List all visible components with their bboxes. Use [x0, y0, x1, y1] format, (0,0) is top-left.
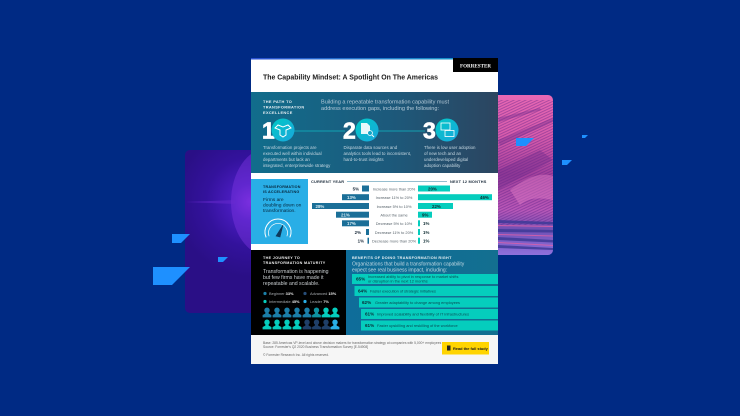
- left values: [316, 186, 364, 244]
- benefit 1: 65%: [356, 276, 365, 282]
- legend: Leader 7%: [310, 299, 329, 304]
- benefit 5: [361, 320, 498, 330]
- left values: 5%: [353, 186, 359, 192]
- step 1 text: departments but lack an: [263, 157, 310, 162]
- step 2 number and icon: [343, 118, 378, 144]
- panel: path to transformation excellence: [251, 92, 498, 173]
- legend: Intermediate 45%: [269, 299, 300, 304]
- connector lines: [294, 130, 425, 132]
- benefit 1: Increased ability to pivot in response to market shifts: [368, 274, 458, 279]
- step 2 number and icon: 2: [343, 118, 356, 144]
- logo: Forrester: FORRESTER: [460, 64, 492, 70]
- step 3 number and icon: [423, 118, 458, 144]
- right values: 1%: [423, 221, 429, 226]
- button: read the full study: [442, 342, 489, 354]
- legend: Advanced 15%: [310, 291, 337, 296]
- benefit 5: 61%: [365, 323, 374, 328]
- benefit 1: [352, 274, 498, 284]
- step 2 text: hard-to-trust insights: [344, 157, 384, 162]
- right values: 1%: [423, 230, 429, 235]
- heading: path: TRANSFORMATION: [263, 104, 305, 110]
- heading: journey: THE JOURNEY TO: [263, 256, 300, 260]
- people pictogram: [263, 308, 339, 329]
- step 2 text: analytics tools lead to inconsistent,: [344, 151, 411, 156]
- category labels: Decrease 5% to 10%: [376, 221, 413, 226]
- right values: 46%: [480, 195, 489, 200]
- category labels: Increase 5% to 10%: [377, 204, 412, 209]
- right values: 20%: [428, 186, 437, 192]
- step 1 text: executed well within individual: [263, 151, 322, 156]
- icon: gauge: [265, 219, 291, 237]
- text: benefits intro: expect see real business impact, including:: [352, 268, 447, 274]
- benefit 4: 61%: [365, 312, 374, 316]
- benefit 2: 64%: [358, 288, 367, 294]
- decorative blue shapes: [153, 135, 588, 285]
- panel: benefits of doing transformation right: [346, 250, 498, 335]
- benefit 3: [359, 298, 498, 308]
- left values: 17%: [347, 221, 356, 226]
- chart: current year vs next 12 months: CURRENT YEAR: [311, 179, 344, 184]
- legend: Beginner 33%: [269, 291, 294, 296]
- benefit 4: Improved scalability and flexibility of IT infrastructures: [377, 311, 469, 316]
- chart: current year vs next 12 months: [311, 179, 492, 244]
- footnote: Base: 285 Americas VP-level and above decision makers for transformation strategy at companies with 5,000+ employees: [263, 341, 442, 345]
- heading: path: THE PATH TO: [263, 99, 292, 104]
- benefit 5: Faster upskilling and reskilling of the workforce: [377, 323, 458, 328]
- benefit 4: [361, 309, 498, 319]
- panel: journey to transformation maturity: [251, 250, 346, 335]
- text: firms: transformation.: [263, 208, 296, 214]
- step 1 number and icon: 1: [262, 118, 275, 144]
- right bars: [418, 186, 492, 244]
- left values: 28%: [316, 204, 324, 209]
- right values: 22%: [432, 204, 441, 209]
- benefit 3: Greater adaptability to change among employees: [375, 300, 460, 305]
- right values: [422, 186, 489, 244]
- panel: transformation is accelerating: [251, 179, 308, 244]
- heading: journey: TRANSFORMATION MATURITY: [263, 261, 326, 265]
- benefit 1: or disruption in the next 12 months: [368, 278, 428, 284]
- left values: 2%: [355, 230, 361, 235]
- intro text: address execution gaps, including the following:: [321, 106, 439, 112]
- infographic document: [251, 58, 498, 364]
- step 2 text: Disparate data sources and: [344, 145, 398, 150]
- left values: 13%: [347, 195, 356, 200]
- category labels: Increase more than 20%: [373, 186, 416, 192]
- heading: benefits: BENEFITS OF DOING TRANSFORMATION RIGHT: [352, 256, 452, 260]
- step 3 text: There is low user adoption: [424, 145, 476, 150]
- benefit 2: [354, 286, 498, 296]
- step 1 number and icon: [262, 118, 294, 144]
- category labels: Increase 11% to 20%: [376, 195, 413, 200]
- step 3 number and icon: 3: [423, 118, 436, 144]
- text: maturity: repeatable and scalable.: [263, 281, 320, 287]
- footnote: Source: Forrester's Q2 2020 Business Transformation Survey [E-54908]: [263, 345, 368, 349]
- image panel: purple light sphere: [185, 148, 305, 313]
- image panel: pink textured waves: [485, 95, 553, 255]
- intro text: Building a repeatable transformation capability must: [321, 100, 449, 106]
- left values: 21%: [341, 212, 350, 218]
- text: benefits intro: Organizations that build a transformation capability: [352, 262, 465, 268]
- copyright: © Forrester Research Inc. All rights reserved.: [263, 353, 329, 357]
- category labels: Decrease more than 20%: [372, 238, 417, 244]
- right values: 1%: [423, 238, 429, 244]
- footer: [251, 335, 498, 364]
- heading: path: EXCELLENCE: [263, 110, 293, 115]
- legend: [263, 291, 337, 304]
- category labels: [372, 186, 417, 244]
- left values: 1%: [358, 238, 364, 244]
- title: The Capability Mindset: A Spotlight On The Americas: [263, 74, 438, 82]
- step 3 text: adoption capability: [424, 163, 461, 168]
- logo: Forrester: [453, 58, 498, 72]
- text: firms: Firms are: [263, 197, 284, 203]
- step 3 text: underdeveloped digital: [424, 157, 468, 162]
- text: maturity: but few firms have made it: [263, 275, 324, 281]
- left bars: [312, 186, 369, 244]
- button: read the full study: Read the full study: [453, 346, 489, 351]
- step 1 text: integrated, enterprisewide strategy: [263, 163, 331, 168]
- chart: current year vs next 12 months: NEXT 12 MONTHS: [450, 179, 487, 184]
- heading: accelerating: IS ACCELERATING: [263, 190, 299, 194]
- benefit 3: 62%: [362, 300, 371, 305]
- text: maturity: Transformation is happening: [263, 269, 329, 275]
- right values: 9%: [422, 212, 428, 218]
- heading: accelerating: TRANSFORMATION: [263, 185, 301, 189]
- benefit 2: Faster execution of strategic initiatives: [370, 288, 436, 293]
- step 3 text: of new tech and an: [424, 151, 462, 156]
- category labels: About the same: [380, 212, 408, 218]
- category labels: Decrease 11% to 20%: [375, 230, 414, 235]
- step 1 text: Transformation projects are: [263, 145, 317, 150]
- text: firms: doubling down on: [263, 202, 302, 208]
